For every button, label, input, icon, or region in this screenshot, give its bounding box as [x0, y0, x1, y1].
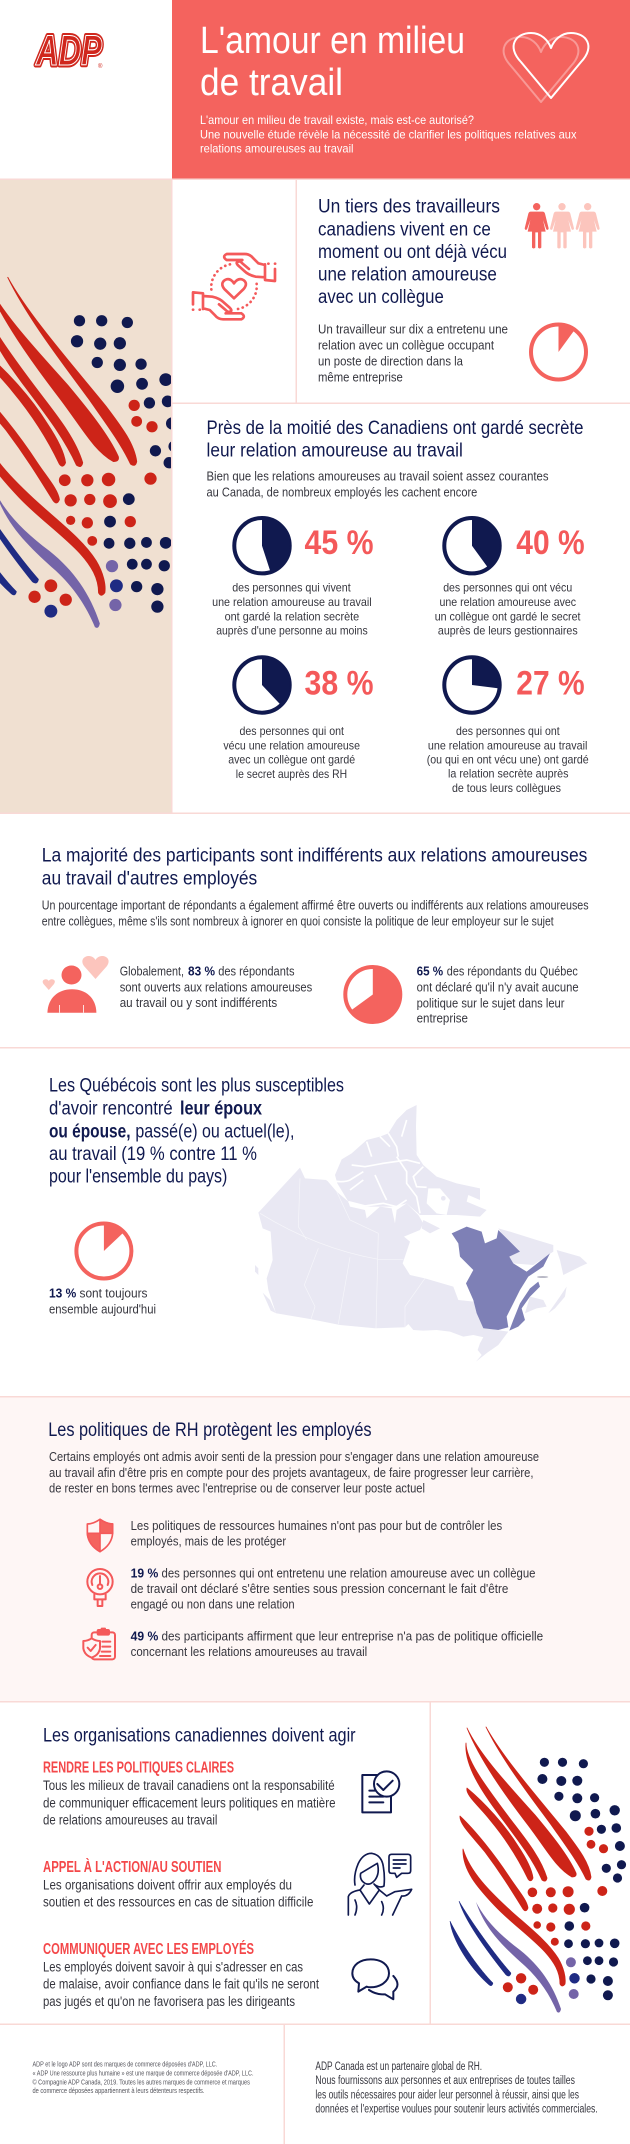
stat: 45%: des personnes qui vivent — [232, 581, 351, 595]
text: policy purpose: employés, mais de les protéger — [131, 1535, 286, 1549]
heading: canadiens vivent en ce — [318, 219, 491, 240]
text: 19%: de travail ont déclaré s'être senties sous pression concernant le fait d'être — [131, 1582, 508, 1596]
stat: 40%: des personnes qui ont vécu — [443, 581, 572, 595]
heading: Les organisations canadiennes doivent agir — [43, 1725, 356, 1746]
stat: 45%: une relation amoureuse au travail — [212, 595, 372, 609]
about ADP text: ADP Canada est un partenaire global de RH. — [315, 2061, 482, 2073]
panel: one third of workers — [193, 197, 600, 384]
heading: moment ou ont déjà vécu — [318, 242, 507, 263]
title: de travail — [200, 62, 343, 104]
heading: La majorité des participants sont indifférents aux relations amoureuses — [42, 846, 587, 867]
heading: avec un collègue — [318, 287, 444, 308]
text: 49%: concernant les relations amoureuses au travail — [131, 1645, 367, 1659]
logo: ADP: ADP — [35, 27, 102, 75]
heading: Les Québécois sont les plus susceptibles — [49, 1076, 344, 1097]
stat: 27%: une relation amoureuse au travail — [428, 738, 587, 752]
text: one in ten — [318, 322, 508, 384]
legal text: « ADP Une ressource plus humaine » est une marque de commerce déposée d'ADP, LLC. — [32, 2069, 253, 2078]
item: call to action: APPEL À L'ACTION/AU SOUTIEN — [43, 1859, 221, 1876]
heading: ou épouse, — [49, 1121, 130, 1142]
heading — [42, 846, 587, 889]
panel: secrecy — [206, 418, 589, 795]
stat: 38%: des personnes qui ont — [240, 724, 345, 738]
stat: 38%: vécu une relation amoureuse — [223, 738, 360, 752]
item: clear policies: RENDRE LES POLITIQUES CLAIRES — [43, 1760, 234, 1777]
stat: 45%: ont gardé la relation secrète — [225, 609, 359, 623]
panel: beige decoration left — [0, 179, 180, 813]
text: 19% — [131, 1566, 536, 1612]
text: policy purpose — [131, 1519, 502, 1549]
heading: pour l'ensemble du pays) — [49, 1167, 227, 1188]
heading: d'avoir rencontré — [49, 1099, 173, 1120]
pie: 65% — [345, 966, 401, 1022]
panel: Quebec — [49, 1076, 587, 1362]
legal text — [32, 2060, 253, 2095]
text: 65%: entreprise — [417, 1012, 468, 1026]
text: 83%: sont ouverts aux relations amoureuses — [120, 981, 312, 995]
intro text: relations amoureuses au travail — [200, 141, 354, 155]
stat: 27%: de tous leurs collègues — [452, 781, 561, 795]
text: 19%: des personnes qui ont entretenu une relation amoureuse avec un collègue — [162, 1566, 536, 1580]
item: communicate: de malaise, avoir confiance dans le fait qu'ils ne seront — [43, 1977, 319, 1992]
item: communicate — [43, 1941, 319, 2009]
stat: 27%: (ou qui en ont vécu une) ont gardé — [427, 753, 589, 767]
heading — [318, 197, 507, 308]
stat: 45%: auprès d'une personne au moins — [216, 624, 368, 638]
stat: 27%: 27 % — [516, 664, 585, 702]
text: one in ten: relation avec un collègue occupant — [318, 338, 494, 352]
text: 83%: au travail ou y sont indifférents — [120, 996, 277, 1010]
text: 19%: engagé ou non dans une relation — [131, 1598, 295, 1612]
heading — [49, 1076, 344, 1188]
text: 13% — [49, 1286, 156, 1316]
stat: 40%: une relation amoureuse avec — [440, 595, 576, 609]
pie: 13% — [76, 1223, 131, 1278]
stat: 27%: des personnes qui ont — [456, 724, 560, 738]
stat: 45%: 45 % — [304, 524, 374, 562]
text: 83%: Globalement, — [120, 965, 184, 979]
text: one in ten: même entreprise — [318, 370, 403, 384]
icon: hands holding heart — [193, 254, 275, 319]
heading — [206, 418, 584, 462]
heading: au travail (19 % contre 11 % — [49, 1144, 257, 1165]
icon: document with check — [362, 1771, 399, 1812]
pie: 10% — [531, 324, 586, 380]
stat: 27%: la relation secrète auprès — [448, 767, 568, 781]
text: 65%: ont déclaré qu'il n'y avait aucune — [417, 981, 579, 995]
intro text: L'amour en milieu de travail existe, mais est-ce autorisé? — [200, 113, 474, 127]
stat: 38% — [223, 657, 374, 781]
intro text: Certains employés ont admis avoir senti de la pression pour s'engager dans une relation amoureuse — [49, 1450, 539, 1464]
intro text: au travail afin d'être pris en compte pour des projets avantageux, de faire progresser leur carrière, — [49, 1466, 534, 1480]
decoration: stripes and dots — [450, 1727, 626, 2013]
stat: 38%: avec un collègue ont gardé — [228, 753, 355, 767]
legal text: de commerce déposées appartiennent à leurs détenteurs respectifs. — [32, 2086, 204, 2095]
text: 65%: politique sur le sujet dans leur — [417, 997, 564, 1011]
legal text: © Compagnie ADP Canada, 2019. Toutes les autres marques de commerce et marques — [32, 2077, 250, 2086]
stat: 40%: auprès de leurs gestionnaires — [438, 624, 578, 638]
intro text: au Canada, de nombreux employés les cachent encore — [206, 485, 477, 499]
stat: 40%: 40 % — [516, 524, 585, 562]
panel: footer — [0, 2024, 630, 2144]
stat: 38%: 38 % — [304, 664, 374, 702]
heading: Près de la moitié des Canadiens ont gardé secrète — [206, 418, 584, 439]
legal text: ADP et le logo ADP sont des marques de commerce déposées d'ADP, LLC. — [32, 2060, 217, 2069]
text: 83%: des répondants — [218, 965, 294, 979]
icon: three women — [525, 203, 600, 248]
stat: 27% — [427, 657, 589, 795]
item: clear policies: de communiquer efficacement leurs politiques en matière — [43, 1795, 336, 1810]
icon: hearts — [504, 33, 588, 102]
item: clear policies: de relations amoureuses au travail — [43, 1813, 217, 1828]
title: L'amour en milieu — [200, 20, 465, 62]
item: communicate: pas jugés et qu'on ne favorisera pas les dirigeants — [43, 1994, 295, 2009]
panel: organisations must act — [43, 1702, 626, 2024]
intro text — [200, 113, 576, 155]
text: 49% — [131, 1629, 543, 1659]
panel: HR policies — [0, 1396, 630, 1702]
text: 83% — [120, 965, 312, 1010]
text: 83%: 83 % — [188, 965, 215, 979]
stat: 38%: le secret auprès des RH — [236, 767, 347, 781]
logo: ADP: ® — [98, 63, 103, 70]
item: communicate: COMMUNIQUER AVEC LES EMPLOYÉS — [43, 1941, 254, 1958]
heading: une relation amoureuse — [318, 265, 497, 286]
stat: 40% — [435, 518, 585, 638]
dividers — [0, 178, 630, 1048]
text: one in ten: un poste de direction dans la — [318, 354, 463, 368]
logo: ADP: ADP — [35, 27, 102, 75]
item: call to action: soutien et des ressources en cas de situation difficile — [43, 1895, 313, 1910]
intro text: de rester en bons termes avec l'entreprise ou de conserver leur poste actuel — [49, 1482, 425, 1496]
intro text — [49, 1450, 539, 1496]
title — [200, 20, 465, 104]
heading: au travail d'autres employés — [42, 868, 257, 889]
text: 13%: sont toujours — [80, 1286, 148, 1300]
panel: header — [172, 0, 630, 179]
heading: passé(e) ou actuel(le), — [135, 1121, 294, 1142]
icon: speech bubbles — [352, 1959, 397, 1999]
text: 19%: 19 % — [131, 1566, 158, 1580]
text: 65%: 65 % — [417, 965, 443, 979]
item: communicate: Les employés doivent savoir à qui s'adresser en cas — [43, 1959, 303, 1974]
item: clear policies — [43, 1760, 336, 1828]
item: call to action — [43, 1859, 313, 1910]
stat: 45% — [212, 518, 374, 638]
icon: shield — [87, 1519, 113, 1552]
item: call to action: Les organisations doivent offrir aux employés du — [43, 1877, 292, 1892]
text: 49%: 49 % — [131, 1629, 158, 1643]
icon: person with hearts — [43, 956, 109, 1013]
heading: leur relation amoureuse au travail — [206, 441, 463, 462]
map of Canada — [255, 1105, 587, 1362]
text: 49%: des participants affirment que leur entreprise n'a pas de politique officielle — [162, 1629, 543, 1643]
text: 13%: 13 % — [49, 1286, 76, 1300]
item: clear policies: Tous les milieux de travail canadiens ont la responsabilité — [43, 1778, 335, 1793]
text: policy purpose: Les politiques de ressources humaines n'ont pas pour but de contrôler les — [131, 1519, 502, 1533]
text: 65% — [417, 965, 579, 1026]
intro text: Bien que les relations amoureuses au travail soient assez courantes — [206, 469, 548, 483]
icon: clipboard with shield — [83, 1629, 115, 1659]
text: one in ten: Un travailleur sur dix a entretenu une — [318, 322, 508, 336]
intro text: Une nouvelle étude révèle la nécessité de clarifier les politiques relatives aux — [200, 127, 576, 141]
about ADP text — [315, 2061, 598, 2116]
text: 13%: ensemble aujourd'hui — [49, 1302, 156, 1316]
icon: woman with speech bubble — [348, 1853, 412, 1915]
heading: Les politiques de RH protègent les employés — [48, 1420, 372, 1441]
stat: 40%: un collègue ont gardé le secret — [435, 609, 581, 623]
heading: Un tiers des travailleurs — [318, 197, 500, 218]
panel: indifference — [42, 846, 589, 1026]
text: 65%: des répondants du Québec — [447, 965, 578, 979]
intro text — [42, 898, 589, 929]
heading: leur époux — [180, 1099, 262, 1120]
intro text — [206, 469, 548, 499]
icon: pressure gauge — [87, 1569, 113, 1606]
